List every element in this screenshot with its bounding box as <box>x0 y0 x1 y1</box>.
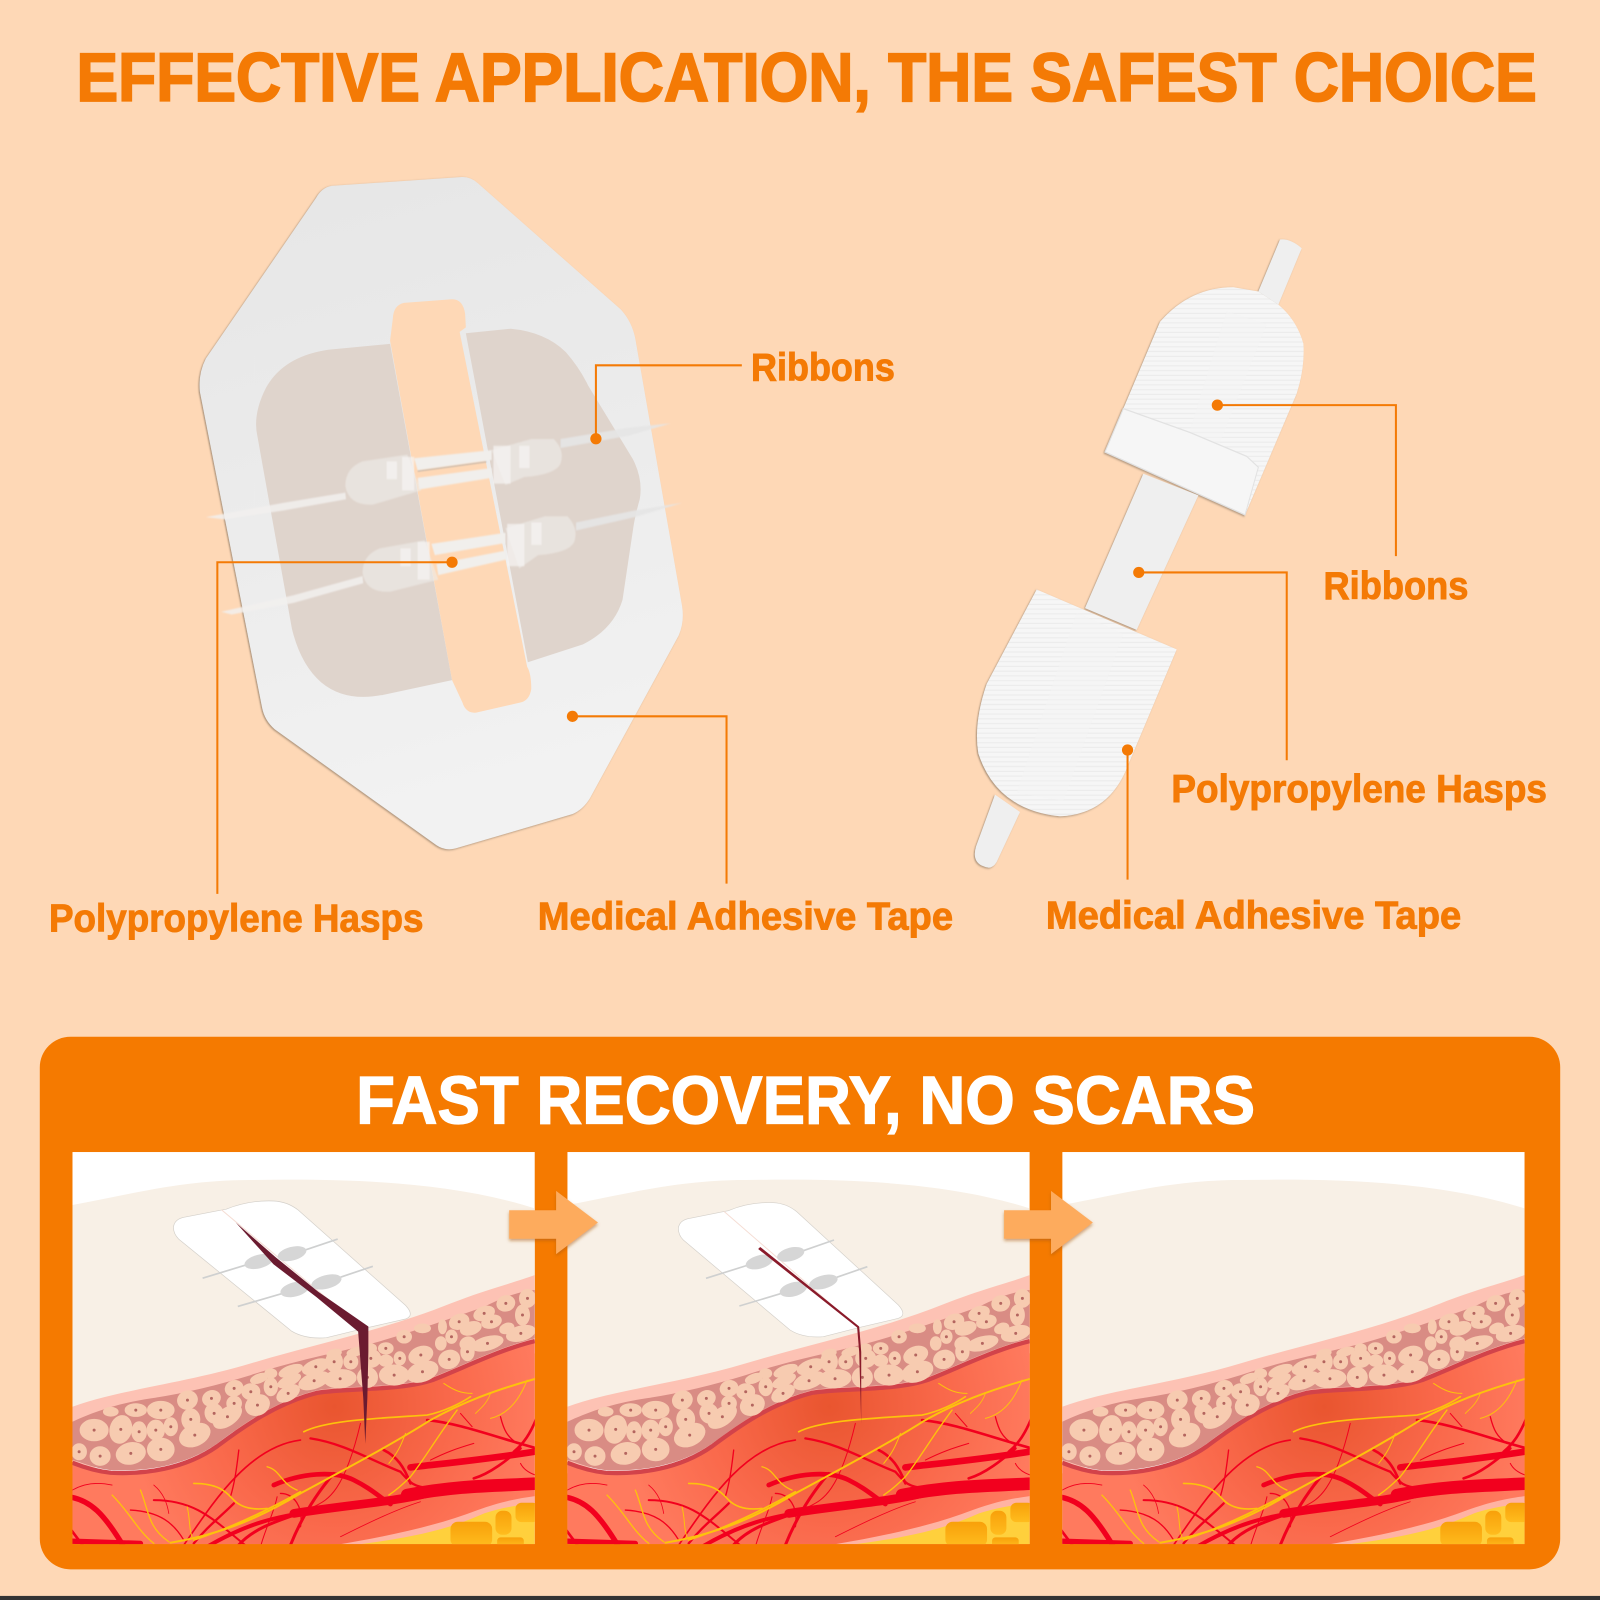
label: polypropylene hasps (left): Polypropylene Hasps <box>49 898 423 941</box>
product: wound closure dressing <box>200 177 683 849</box>
wound <box>236 1222 368 1444</box>
strip tips and centre ribbon <box>975 239 1302 868</box>
label: medical adhesive tape (right) <box>1046 744 1461 938</box>
upper pad <box>1105 287 1304 515</box>
bandage with hasps <box>173 1201 410 1338</box>
label: medical adhesive tape (left) <box>538 711 953 939</box>
label: ribbons (right): Ribbons <box>1323 565 1468 608</box>
label: polypropylene hasps (right) <box>1133 567 1547 811</box>
label: medical adhesive tape (left): Medical Adhesive Tape <box>538 896 953 939</box>
lower pad <box>977 589 1177 816</box>
dressing backing <box>200 177 683 849</box>
hasp: upper <box>206 423 671 519</box>
stage 3: healed skin <box>1059 1152 1530 1547</box>
label: polypropylene hasps (left) <box>49 557 458 941</box>
panel: fast recovery <box>40 1037 1560 1569</box>
product: single closure strip <box>975 239 1304 868</box>
label: ribbons (left) <box>590 347 895 444</box>
arrow 2 <box>1004 1191 1093 1254</box>
beige pad <box>256 329 641 697</box>
bandage with hasps <box>678 1203 903 1337</box>
wound line <box>758 1247 861 1423</box>
label: medical adhesive tape (right): Medical Adhesive Tape <box>1046 895 1461 938</box>
bottom dark bar <box>0 1596 1600 1600</box>
label: polypropylene hasps (right): Polypropylene Hasps <box>1171 768 1547 811</box>
hasp: lower <box>221 503 682 614</box>
arrow 1 <box>509 1191 598 1254</box>
label: ribbons (left): Ribbons <box>751 347 895 390</box>
centre bands <box>1017 311 1267 801</box>
central slot <box>390 299 531 713</box>
label: ribbons (right) <box>1212 399 1468 608</box>
stage 1: open wound <box>69 1152 540 1547</box>
panel heading: FAST RECOVERY, NO SCARS <box>356 1063 1255 1138</box>
stage 2: closing wound <box>564 1152 1035 1547</box>
